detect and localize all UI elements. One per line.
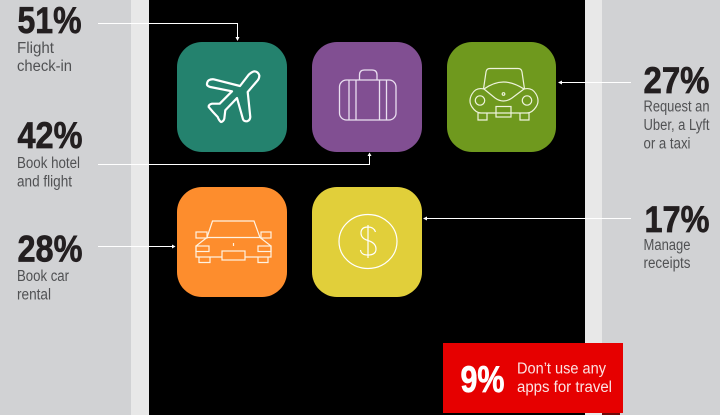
stat: 51% flight check-in: 51% [18,0,82,41]
stat: 28% book car rental: rental [17,286,51,304]
callout: 9% no apps: apps for travel [517,379,612,396]
stat: 28% book car rental [17,228,82,304]
stat: 17% manage receipts: 17% [644,199,710,240]
icon tile: flight [177,42,287,152]
stat: 28% book car rental: 28% [18,228,82,270]
icon tile: suitcase [312,42,422,152]
stat: 42% book hotel and flight: and flight [17,174,73,190]
panel: left sidebar [0,0,149,415]
panel: right sidebar [585,0,720,415]
connector: 27% [558,80,631,84]
icon tile: classic car [447,42,556,152]
icon tile: rental car [177,187,287,297]
stat: 42% book hotel and flight [17,115,82,190]
stat: 17% manage receipts: receipts [644,255,691,272]
stat: 28% book car rental: Book car [17,268,69,285]
connector: 17% [423,216,631,220]
stat: 27% request ride: Uber, a Lyft [644,117,710,134]
stat: 42% book hotel and flight: 42% [18,115,82,156]
connector: 28% [98,244,176,248]
callout: 9% no apps: 9% [460,359,504,400]
stat: 42% book hotel and flight: Book hotel [17,155,80,172]
callout: 9% no apps: Don’t use any [517,360,606,378]
stat: 17% manage receipts: Manage [644,237,690,254]
stat: 27% request ride: 27% [644,60,710,101]
stat: 51% flight check-in [17,0,82,75]
stat: 27% request ride: or a taxi [644,136,690,152]
icon tile: receipts dollar [312,187,422,297]
callout: 9% no apps [443,343,623,415]
stat: 27% request ride [644,60,710,152]
stat: 51% flight check-in: Flight [17,40,55,57]
panel: black phone screen [149,0,585,415]
connector: 51% [98,24,240,41]
stat: 51% flight check-in: check-in [17,58,72,75]
connector: 42% [98,152,372,164]
stat: 17% manage receipts [644,199,710,272]
